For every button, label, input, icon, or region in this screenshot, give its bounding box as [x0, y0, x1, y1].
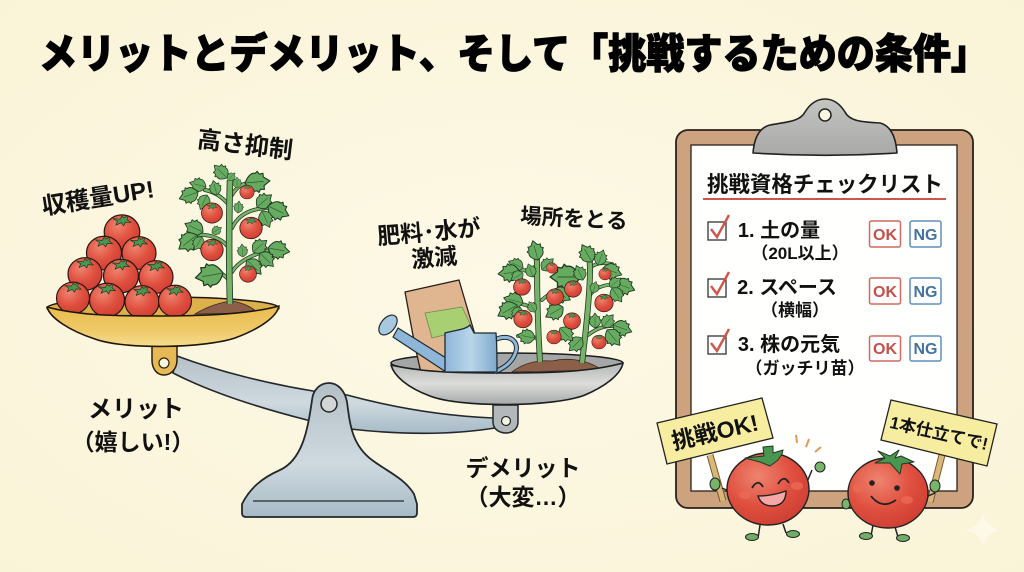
sparkle — [966, 514, 1000, 546]
label: merit: （嬉しい!） — [72, 429, 194, 455]
panel: merit pan — [47, 160, 293, 346]
panel: clipboard checklist — [676, 99, 973, 508]
sign pole — [930, 455, 942, 502]
label: harvest up: 収穫量UP! — [40, 176, 156, 221]
label: merit — [72, 396, 194, 455]
label: fertilizer and water: 激減 — [410, 243, 458, 273]
label: height control: 高さ抑制 — [196, 126, 294, 165]
tomato plant: height control — [173, 160, 293, 304]
item 3: NG — [914, 341, 938, 358]
clipboard board — [676, 130, 973, 508]
item 2 — [708, 272, 941, 320]
silver pan bowl — [391, 363, 623, 405]
heading underline — [703, 198, 946, 200]
item 1 — [708, 215, 941, 263]
soil — [512, 359, 602, 372]
item 2: OK — [873, 284, 897, 301]
item 3: OK — [873, 341, 897, 358]
clip — [753, 99, 897, 155]
tomato plants: take up space — [493, 238, 638, 363]
gold pan bowl — [47, 306, 279, 346]
sign: challenge OK: 挑戦OK! — [669, 409, 761, 455]
label: fertilizer and water: 肥料･水が — [376, 215, 482, 250]
checklist heading: 挑戦資格チェックリスト — [707, 172, 943, 197]
tomato character: right with sign — [842, 400, 997, 542]
label: merit: メリット — [88, 396, 184, 423]
item 1: OK — [873, 227, 897, 244]
balance scale — [152, 346, 518, 517]
arms and legs — [871, 493, 935, 537]
label: demerit: デメリット — [466, 455, 580, 481]
calyx — [875, 450, 914, 474]
item 3 — [708, 329, 941, 378]
sign: single stem training — [881, 400, 997, 466]
sign: challenge OK — [657, 398, 773, 464]
tomato body — [848, 458, 928, 528]
happy face — [739, 479, 803, 506]
smiling face — [853, 480, 913, 504]
label: demerit: （大変…） — [466, 484, 580, 510]
item 1: NG — [914, 227, 938, 244]
label: demerit — [466, 455, 580, 510]
tomato body — [727, 453, 809, 525]
gold pan back rim — [47, 297, 279, 319]
watering can — [375, 312, 516, 372]
item 3: 3. 株の元気 — [738, 333, 840, 356]
item 1: 1. 土の量 — [738, 219, 820, 242]
item 2: （横幅） — [761, 301, 829, 320]
item 2: 2. スペース — [737, 277, 837, 299]
label: takes space: 場所をとる — [520, 204, 628, 234]
gold pan bracket — [152, 346, 177, 375]
joy marks — [796, 435, 821, 452]
silver pan bracket — [493, 405, 518, 433]
arms and legs — [722, 470, 812, 538]
paper — [691, 145, 957, 491]
scale beam — [173, 356, 495, 433]
fertilizer bag — [405, 280, 478, 372]
sign: single stem training: 1本仕立てで! — [888, 413, 990, 454]
label: fertilizer and water — [376, 215, 484, 275]
item 2: NG — [914, 284, 938, 301]
sign pole — [710, 455, 723, 501]
item 1: （20L以上） — [751, 244, 849, 263]
tomato pile — [56, 215, 192, 318]
panel: demerit pan — [375, 238, 638, 405]
soil — [195, 301, 259, 314]
item 3: （ガッチリ苗） — [746, 359, 864, 378]
silver pan back rim — [391, 353, 623, 373]
scale stand — [242, 383, 417, 517]
calyx — [745, 446, 783, 466]
tomato character: left with sign — [657, 398, 825, 540]
